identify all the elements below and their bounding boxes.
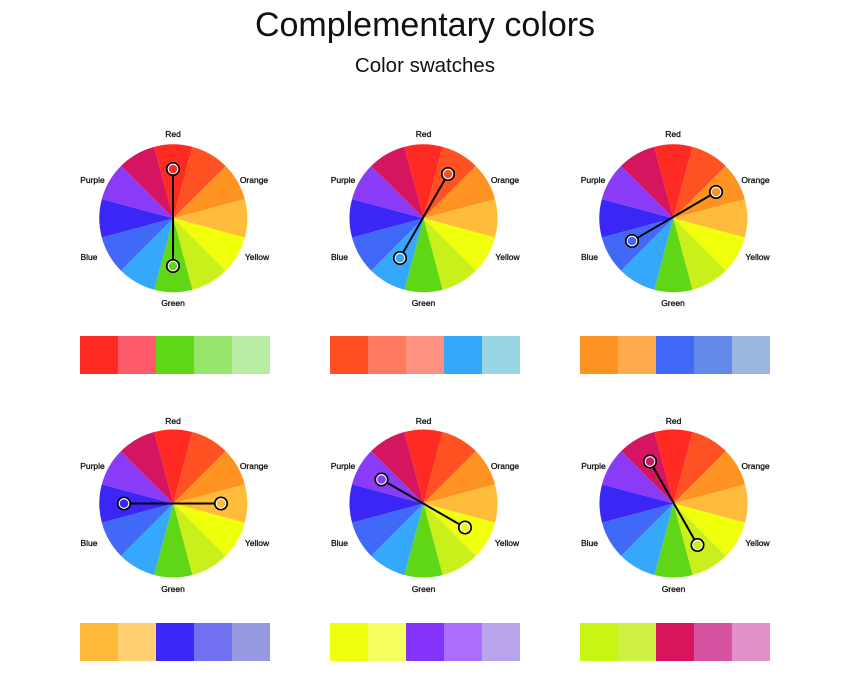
swatches 5: [330, 623, 520, 661]
wheel labels 1: Orange: [240, 175, 268, 185]
panel: yellow and purple: [330, 416, 520, 661]
wheel labels 5: Blue: [331, 538, 348, 548]
wheel labels 4: Orange: [240, 461, 268, 471]
wheel labels 2: [331, 129, 520, 308]
wheel labels 5: [331, 416, 520, 594]
color wheel 4: [99, 429, 247, 578]
wheel labels 4: Red: [165, 416, 181, 426]
color wheel 2: [349, 144, 498, 292]
marker: red: [167, 163, 179, 175]
wheel labels 2: Blue: [331, 252, 348, 262]
swatches 2: [330, 336, 520, 374]
wheel labels 2: Green: [412, 298, 436, 308]
wheel labels 6: [581, 416, 770, 594]
connector 1: [172, 169, 174, 266]
panel: orange and blue: [580, 129, 770, 374]
wheel labels 1: [80, 129, 270, 308]
wheel labels 6: Red: [666, 416, 682, 426]
subtitle: Color swatches: [355, 54, 495, 77]
wheel labels 1: Green: [161, 298, 185, 308]
wheel labels 4: Blue: [80, 538, 98, 548]
wheel labels 2: Purple: [331, 175, 356, 185]
wheel labels 2: Red: [416, 129, 432, 139]
wheel labels 5: Red: [416, 416, 432, 426]
swatches 3: [580, 336, 770, 374]
wheel labels 6: Green: [662, 584, 686, 594]
color wheel 6: [599, 429, 748, 578]
wheel labels 4: [80, 416, 270, 594]
marker: blue: [626, 235, 638, 247]
color wheel 5: [349, 429, 498, 578]
color wheel 3: [599, 144, 747, 292]
wheel labels 6: Yellow: [745, 538, 770, 548]
wheel labels 3: [581, 129, 770, 308]
connector 6: [650, 462, 698, 545]
panel: red-orange and light blue: [330, 129, 520, 374]
wheel labels 4: Yellow: [245, 538, 270, 548]
swatches 6: [580, 623, 770, 661]
connector 2: [400, 174, 448, 258]
wheel labels 1: Yellow: [245, 252, 270, 262]
marker: green: [167, 260, 179, 272]
marker: indigo: [118, 497, 130, 510]
wheel labels 3: Orange: [741, 175, 770, 185]
wheel labels 1: Blue: [80, 252, 98, 262]
swatches 4: [80, 623, 270, 661]
marker: yellow-green: [691, 539, 704, 551]
color wheel 1: [99, 144, 247, 292]
wheel labels 2: Orange: [491, 175, 519, 185]
panel: amber and indigo: [80, 416, 270, 661]
connector 5: [382, 480, 465, 528]
wheel labels 5: Orange: [491, 461, 519, 471]
marker: amber: [215, 497, 227, 510]
wheel labels 3: Red: [665, 129, 681, 139]
wheel labels 2: Yellow: [495, 252, 520, 262]
marker: magenta: [644, 455, 656, 468]
marker: light blue: [394, 252, 406, 264]
marker: yellow: [459, 521, 471, 534]
wheel labels 5: Green: [412, 584, 436, 594]
panel: yellow-green and magenta: [580, 416, 770, 661]
wheel labels 3: Green: [661, 298, 685, 308]
wheel labels 6: Blue: [581, 538, 598, 548]
marker: purple: [375, 473, 388, 486]
connector 4: [124, 502, 221, 504]
wheel labels 3: Blue: [581, 252, 598, 262]
wheel labels 1: Red: [165, 129, 181, 139]
wheel labels 1: Purple: [80, 175, 105, 185]
wheel labels 3: Yellow: [745, 252, 770, 262]
title: Complementary colors: [255, 6, 595, 44]
wheel labels 4: Purple: [80, 461, 105, 471]
marker: orange: [710, 186, 722, 198]
wheel labels 6: Purple: [581, 461, 606, 471]
wheel labels 6: Orange: [741, 461, 770, 471]
wheel labels 5: Purple: [331, 461, 356, 471]
marker: red-orange: [442, 168, 454, 180]
swatches 1: [80, 336, 270, 374]
wheel labels 5: Yellow: [495, 538, 520, 548]
wheel labels 3: Purple: [581, 175, 606, 185]
connector 3: [632, 192, 716, 241]
wheel labels 4: Green: [161, 584, 185, 594]
panel: red and green: [80, 129, 270, 374]
